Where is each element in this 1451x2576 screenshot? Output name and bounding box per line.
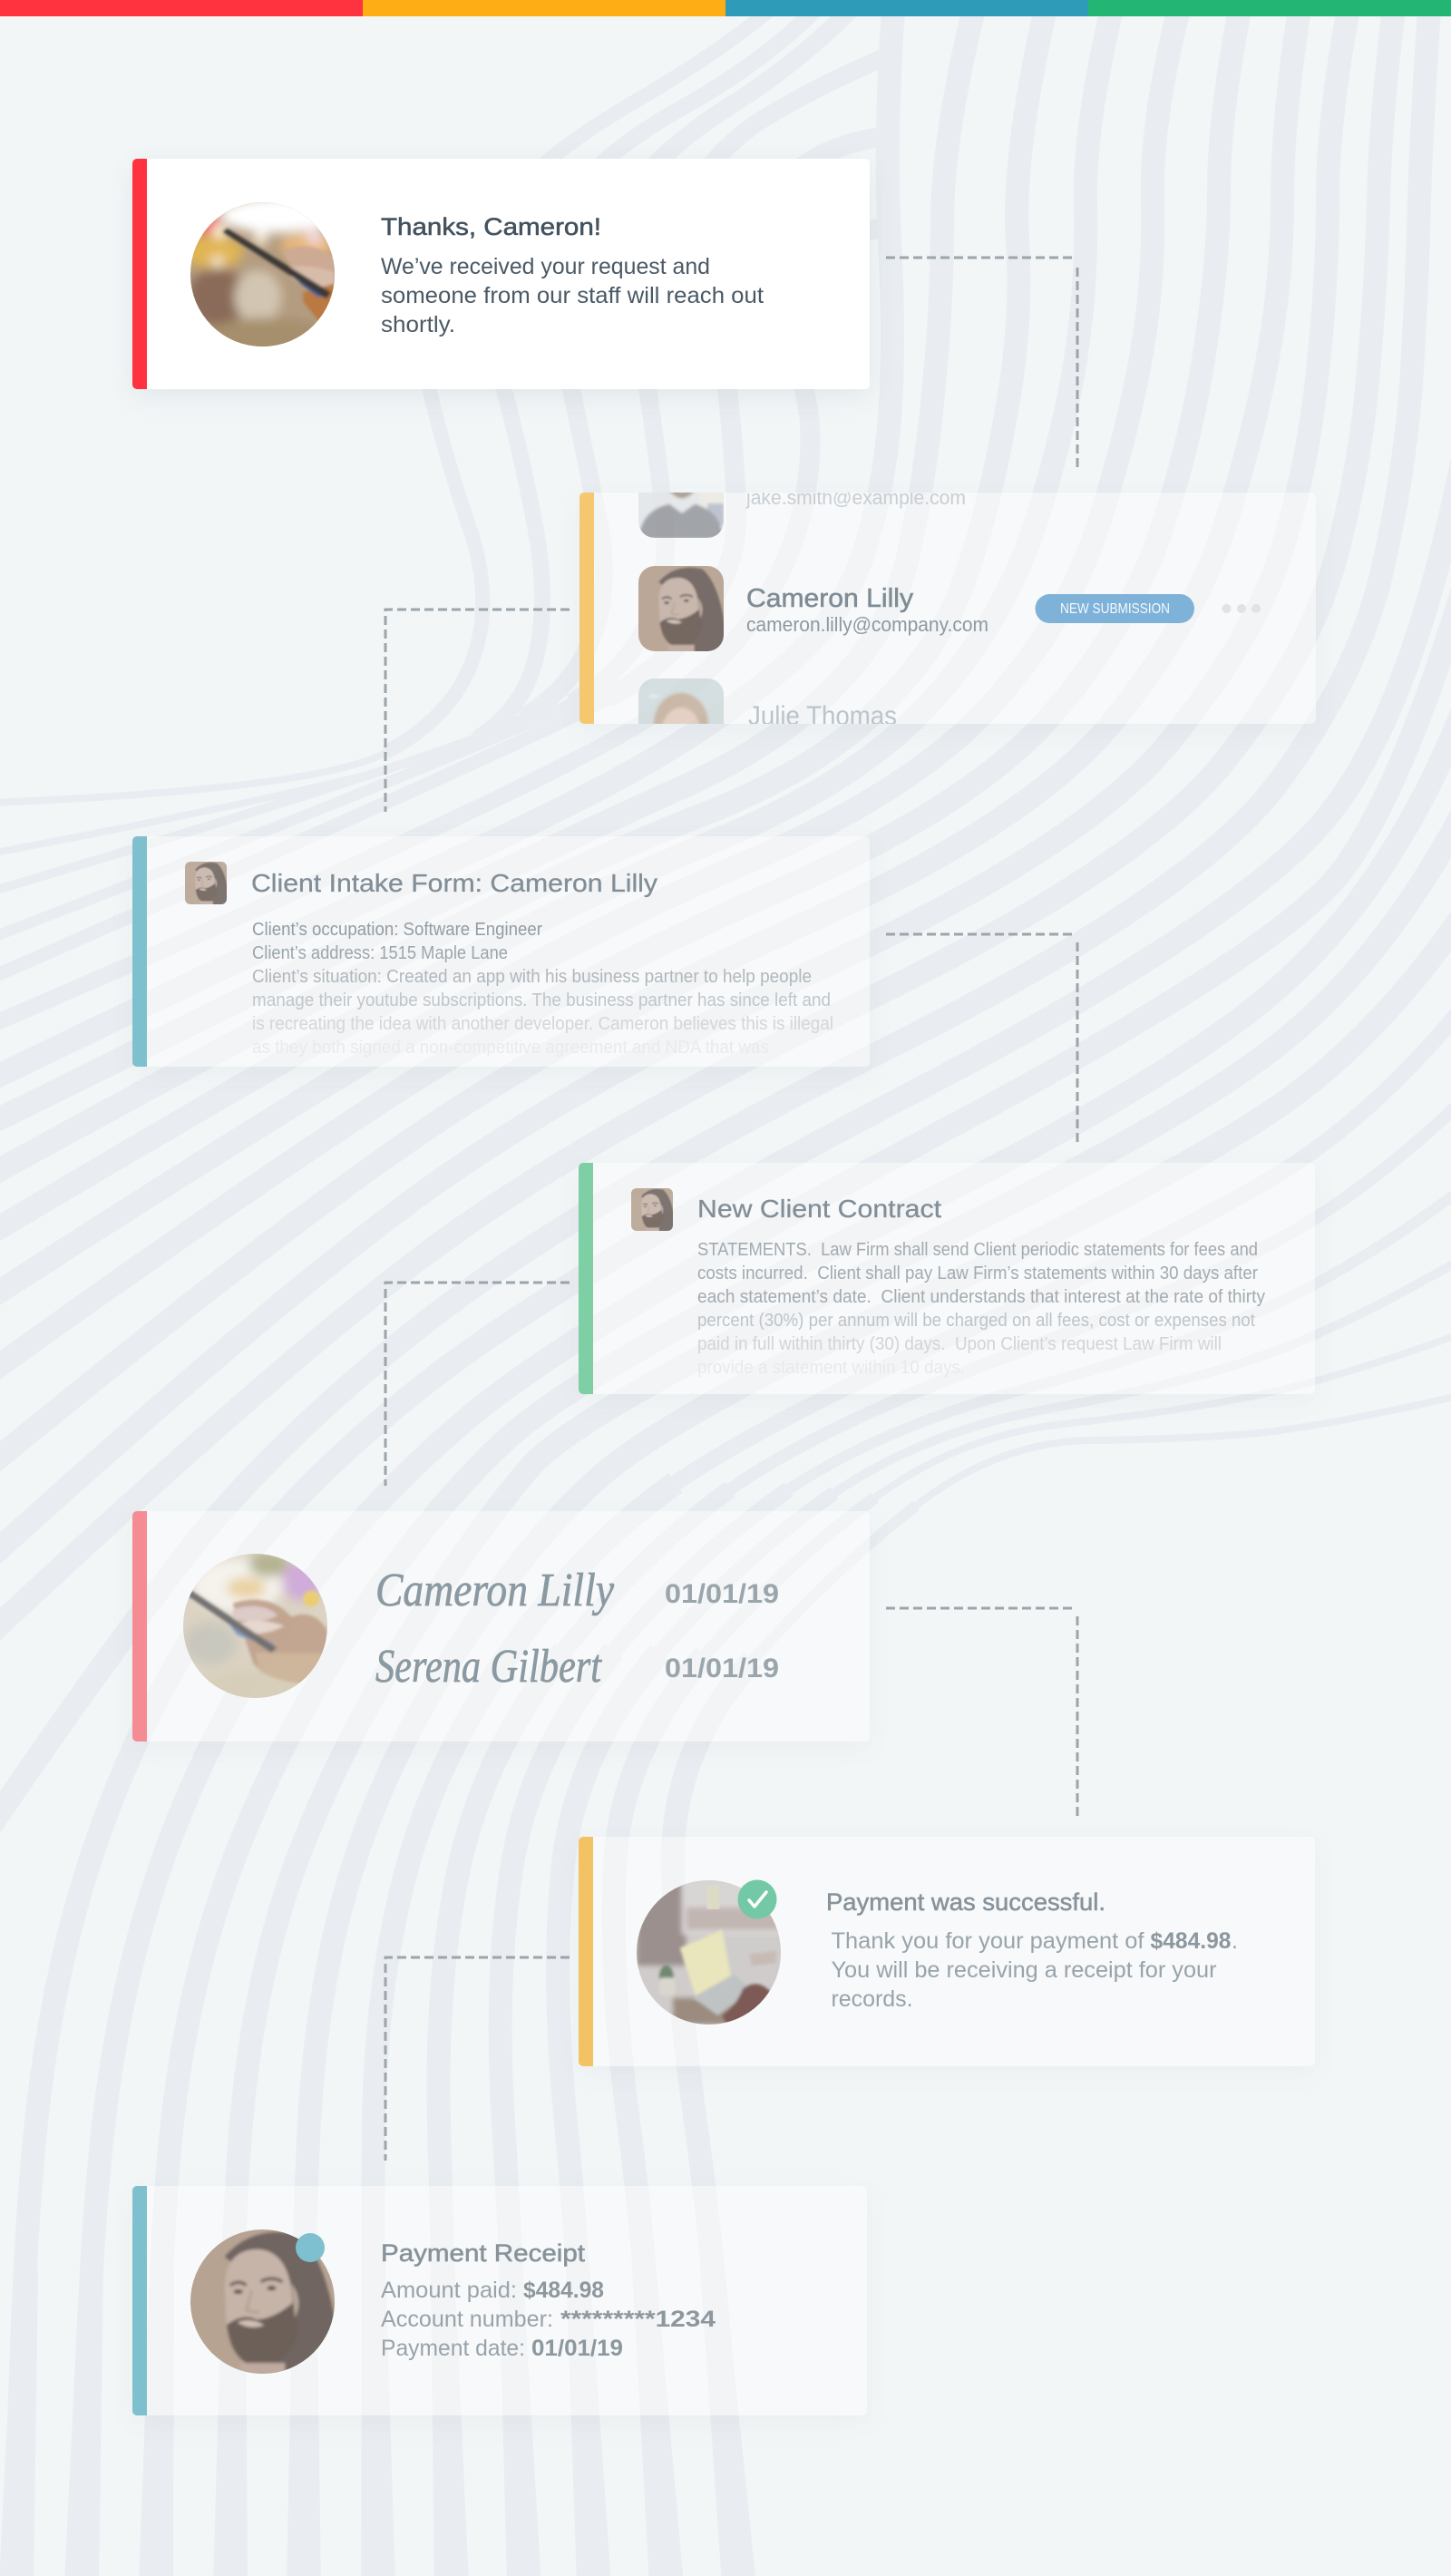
panel: payment success <box>579 1837 1315 2066</box>
body text: records. <box>831 1986 912 2012</box>
panel: client intake form <box>132 836 870 1067</box>
accent bar <box>132 1511 147 1742</box>
panel: submissions list <box>579 493 1316 724</box>
panel: thanks confirmation <box>132 159 870 389</box>
form text: as they both signed a non-competitive agreement and NDA that was <box>252 1038 769 1058</box>
photo: cameron portrait <box>190 2230 335 2374</box>
name and email: cameron: Cameron Lilly <box>746 584 914 613</box>
form text: Client’s occupation: Software Engineer <box>252 920 542 940</box>
heading: payment successful: Payment was successful. <box>826 1888 1105 1916</box>
body text: Thank you for your payment of <box>831 1928 1144 1954</box>
body text: . <box>1232 1928 1238 1954</box>
form text: Client’s situation: Created an app with his business partner to help people <box>252 967 812 987</box>
receipt details: $484.98 <box>523 2278 604 2303</box>
form text: Client’s address: 1515 Maple Lane <box>252 943 508 963</box>
connector 6 <box>385 1957 570 2161</box>
receipt details: *********1234 <box>560 2307 716 2332</box>
accent bar <box>579 1163 593 1394</box>
receipt details <box>381 2278 716 2361</box>
avatar <box>631 1188 673 1231</box>
top colour bar <box>0 0 1451 16</box>
body text <box>381 254 764 337</box>
body text: someone from our staff will reach out <box>381 283 764 308</box>
contract text: costs incurred. Client shall pay Law Firm’s statements within 30 days after <box>697 1264 1258 1283</box>
signature: cameron: Cameron Lilly <box>375 1565 615 1616</box>
heading: thanks: Thanks, Cameron! <box>381 213 601 240</box>
contract text: each statement’s date. Client understands that interest at the rate of thirty <box>697 1287 1265 1307</box>
receipt details: Account number: <box>381 2307 553 2332</box>
accent bar <box>132 2186 147 2415</box>
avatar: julie <box>638 678 724 724</box>
body text: You will be receiving a receipt for your <box>831 1957 1217 1983</box>
photo: laptop on desk <box>637 1880 781 2025</box>
panel: signatures <box>132 1511 870 1742</box>
form text: is recreating the idea with another developer. Cameron believes this is illegal <box>252 1014 833 1034</box>
icon: check badge <box>738 1879 776 1919</box>
panel: new client contract <box>579 1163 1315 1394</box>
body text: $484.98 <box>1150 1928 1232 1954</box>
avatar: cameron <box>638 566 724 651</box>
body text: shortly. <box>381 312 455 337</box>
contract text <box>697 1240 1265 1378</box>
date: serena: 01/01/19 <box>665 1654 779 1683</box>
name and email: cameron <box>746 584 988 636</box>
heading: intake form: Client Intake Form: Cameron Lilly <box>251 869 657 897</box>
connector 1 <box>886 258 1077 467</box>
accent bar <box>579 493 594 724</box>
photo: hand holding phone <box>182 197 335 357</box>
badge: new submission: NEW SUBMISSION <box>1060 601 1170 617</box>
form text <box>252 920 833 1058</box>
accent bar <box>132 836 147 1067</box>
accent bar <box>579 1837 593 2066</box>
receipt details: Amount paid: <box>381 2278 517 2303</box>
accent bar <box>132 159 147 389</box>
heading: contract: New Client Contract <box>697 1195 941 1223</box>
contract text: provide a statement within 10 days. <box>697 1358 965 1378</box>
panel: payment receipt <box>132 2186 738 2415</box>
avatar <box>185 862 227 904</box>
receipt details: Payment date: <box>381 2336 525 2361</box>
connector 5 <box>886 1608 1077 1816</box>
receipt details: 01/01/19 <box>531 2336 623 2361</box>
contract text: STATEMENTS. Law Firm shall send Client periodic statements for fees and <box>697 1240 1258 1260</box>
date: cameron: 01/01/19 <box>665 1579 779 1609</box>
body text: We’ve received your request and <box>381 254 710 279</box>
badge: new submission <box>1036 594 1194 623</box>
connector 4 <box>385 1283 570 1486</box>
signature: serena: Serena Gilbert <box>375 1641 602 1693</box>
name and email: cameron: cameron.lilly@company.com <box>746 613 988 636</box>
connector 2 <box>385 610 570 812</box>
status dot <box>296 2233 325 2262</box>
photo: phone in hand <box>183 1552 327 1711</box>
form text: manage their youtube subscriptions. The business partner has since left and <box>252 990 831 1010</box>
contract text: percent (30%) per annum will be charged on all fees, cost or expenses not <box>697 1311 1255 1331</box>
contract text: paid in full within thirty (30) days. Upon Client’s request Law Firm will <box>697 1334 1222 1354</box>
heading: receipt: Payment Receipt <box>381 2239 586 2267</box>
connector 3 <box>886 934 1077 1142</box>
body text <box>831 1928 1238 2012</box>
avatar: jake <box>638 493 724 538</box>
menu dots <box>1222 604 1261 613</box>
